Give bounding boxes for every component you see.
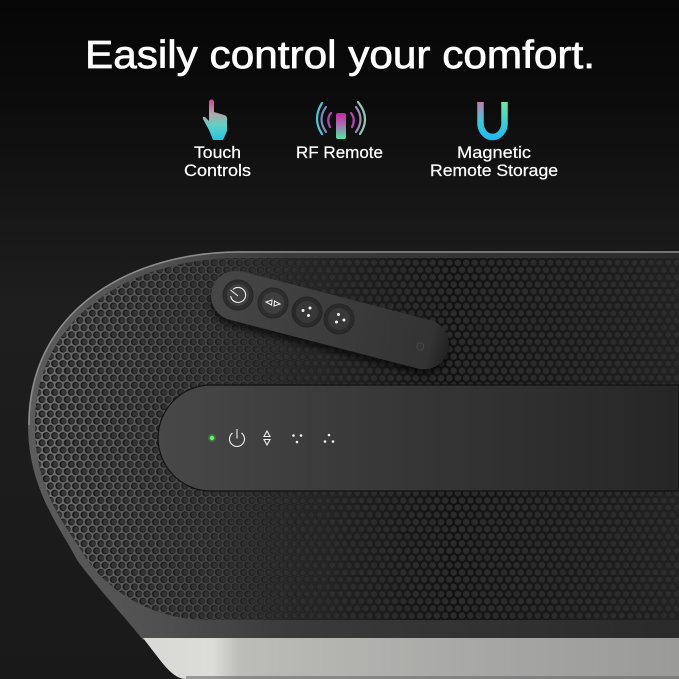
remote shadow xyxy=(205,271,454,381)
label: magnetic remote storage: Remote Storage xyxy=(430,162,558,180)
remote button: power xyxy=(223,280,253,310)
indicator LED xyxy=(208,434,216,442)
icon: power xyxy=(230,429,244,447)
remote button: oscillate xyxy=(258,288,288,318)
rim highlight xyxy=(29,252,679,425)
control panel xyxy=(158,385,679,491)
feature: RF remote xyxy=(296,102,383,162)
remote control xyxy=(206,265,454,375)
silver base xyxy=(143,638,679,679)
icon: three dots high xyxy=(324,434,334,443)
perforated grille xyxy=(0,250,679,630)
remote logo mark xyxy=(416,342,425,351)
label: magnetic remote storage: Magnetic xyxy=(457,144,531,162)
panel shape xyxy=(158,385,679,491)
title: Easily control your comfort. xyxy=(85,34,595,77)
label: touch controls: Controls xyxy=(184,162,251,180)
remote button: fan high xyxy=(324,304,354,334)
label: magnetic remote storage xyxy=(430,144,558,180)
label: RF remote: RF Remote xyxy=(296,144,383,162)
icon: up down arrows xyxy=(264,431,270,445)
remote body xyxy=(206,265,454,375)
icon: remote with radio waves xyxy=(317,102,365,139)
icon: magnet xyxy=(480,102,505,137)
label: touch controls: Touch xyxy=(194,144,241,162)
base shadow line xyxy=(186,676,679,679)
remote button: fan low xyxy=(292,297,322,327)
feature: touch controls xyxy=(184,100,251,180)
feature: magnetic remote storage xyxy=(430,102,558,180)
body shell xyxy=(28,251,679,640)
product: air purifier body xyxy=(0,250,679,679)
icon: pointing hand xyxy=(203,100,227,140)
label: touch controls xyxy=(184,144,251,180)
icon: three dots low xyxy=(292,434,302,443)
